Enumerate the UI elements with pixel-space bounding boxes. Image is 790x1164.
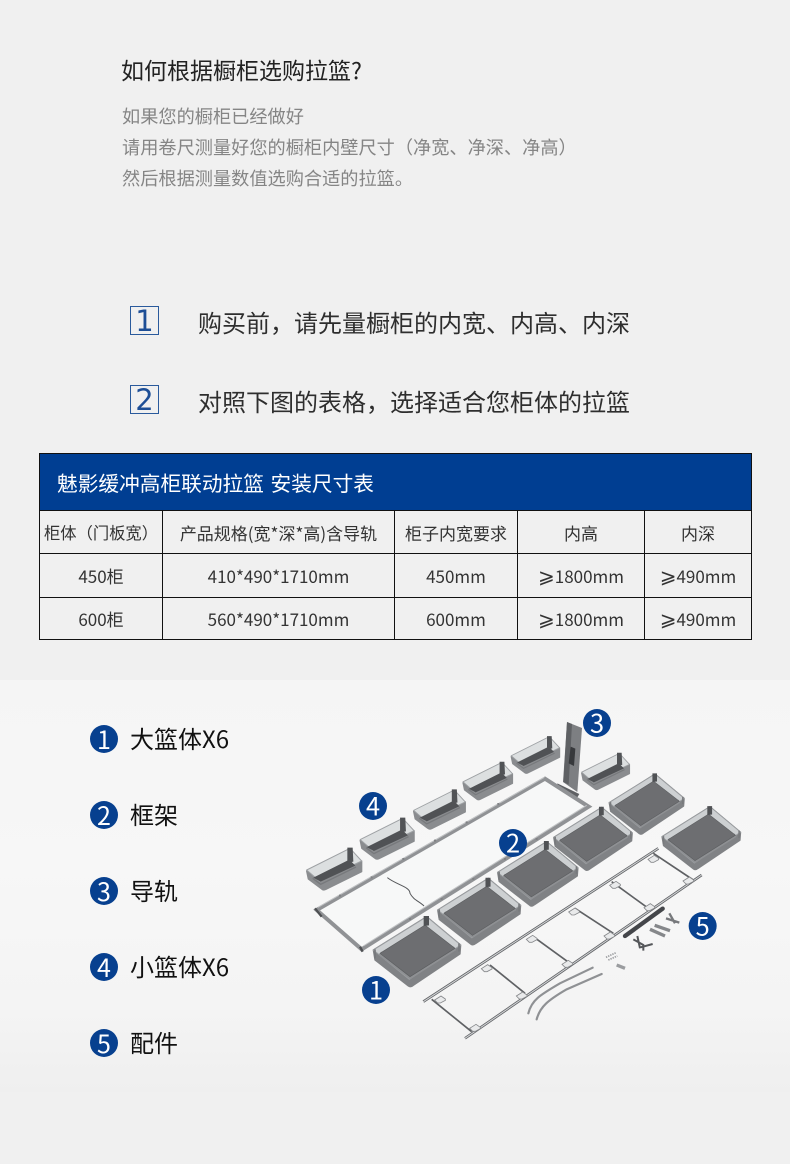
badge 1 [362, 971, 390, 1007]
intro text block [122, 103, 577, 191]
badge 4 [359, 787, 387, 823]
badge 2 [499, 824, 527, 860]
exploded product diagram [306, 704, 742, 1040]
large basket 3 [498, 841, 578, 906]
legend item 3 [90, 872, 178, 909]
lower panel background [0, 680, 790, 1092]
step 1 text: 购买前，请先量橱柜的内宽、内高、内深 [198, 304, 630, 339]
badge 3 [583, 704, 611, 740]
legend item 2: 2 [97, 797, 111, 833]
legend item 4: 4 [97, 949, 111, 985]
size table: ⩾1800mm [538, 560, 624, 589]
badge 2: 2 [506, 824, 520, 860]
ladder rails [423, 848, 702, 1038]
badge 4: 4 [366, 787, 380, 823]
large basket 2 [438, 878, 521, 945]
size table: 410*490*1710mm [208, 563, 349, 588]
size table: ⩾490mm [660, 603, 736, 632]
legend item 4: 小篮体X6 [130, 948, 229, 983]
size table: 560*490*1710mm [208, 606, 349, 631]
legend item 1 [90, 720, 229, 757]
step 2 text: 对照下图的表格，选择适合您柜体的拉篮 [198, 383, 630, 418]
legend item 4 [90, 948, 229, 985]
step 1 number box [130, 306, 159, 335]
small basket 4 [463, 762, 512, 800]
size table: 柜子内宽要求 [405, 520, 507, 544]
intro line 3: 然后根据测量数值选购合适的拉篮。 [122, 165, 413, 191]
step 2 number box [130, 385, 159, 414]
size table: 产品规格(宽*深*高)含导轨 [180, 520, 377, 544]
large basket 1 [373, 916, 461, 987]
title: 如何根据橱柜选购拉篮? [121, 52, 362, 86]
size table: 柜体（门板宽） [44, 520, 158, 544]
size table [39, 453, 752, 640]
small basket 2 [360, 818, 414, 859]
guide rail [557, 722, 582, 797]
accessories [606, 909, 679, 968]
size table: ⩾1800mm [538, 603, 624, 632]
legend item 1: 大篮体X6 [130, 720, 229, 755]
large basket 4 [554, 807, 632, 870]
size table: 魅影缓冲高柜联动拉篮 安装尺寸表 [57, 467, 374, 497]
legend item 3: 3 [97, 873, 111, 909]
badge 1: 1 [369, 971, 383, 1007]
curved rods [528, 968, 602, 1019]
large basket 6 [662, 806, 741, 870]
size table: 450柜 [78, 563, 124, 588]
size table: 600柜 [78, 606, 124, 631]
legend item 5 [90, 1024, 178, 1061]
size table: 600mm [426, 606, 486, 631]
small basket 6 [582, 753, 629, 790]
badge 5: 5 [696, 907, 710, 943]
legend item 1: 1 [97, 721, 111, 757]
step 2 number box: 2 [135, 383, 154, 417]
step 1 number box: 1 [135, 304, 154, 338]
size table: 内高 [564, 520, 598, 544]
legend item 5: 5 [97, 1025, 111, 1061]
size table: 450mm [426, 563, 486, 588]
legend item 2 [90, 796, 178, 833]
badge 3: 3 [590, 704, 604, 740]
small basket 3 [414, 789, 465, 829]
intro line 1: 如果您的橱柜已经做好 [122, 103, 304, 129]
frame [315, 777, 589, 952]
small basket 5 [511, 736, 560, 773]
legend item 3: 导轨 [130, 872, 178, 907]
badge 5 [689, 907, 717, 943]
size table: ⩾490mm [660, 560, 736, 589]
size table: 内深 [681, 520, 715, 544]
legend item 5: 配件 [130, 1024, 178, 1059]
small basket 1 [307, 848, 362, 890]
large basket 5 [609, 773, 684, 834]
intro line 2: 请用卷尺测量好您的橱柜内壁尺寸（净宽、净深、净高） [122, 134, 577, 160]
legend item 2: 框架 [130, 796, 178, 831]
